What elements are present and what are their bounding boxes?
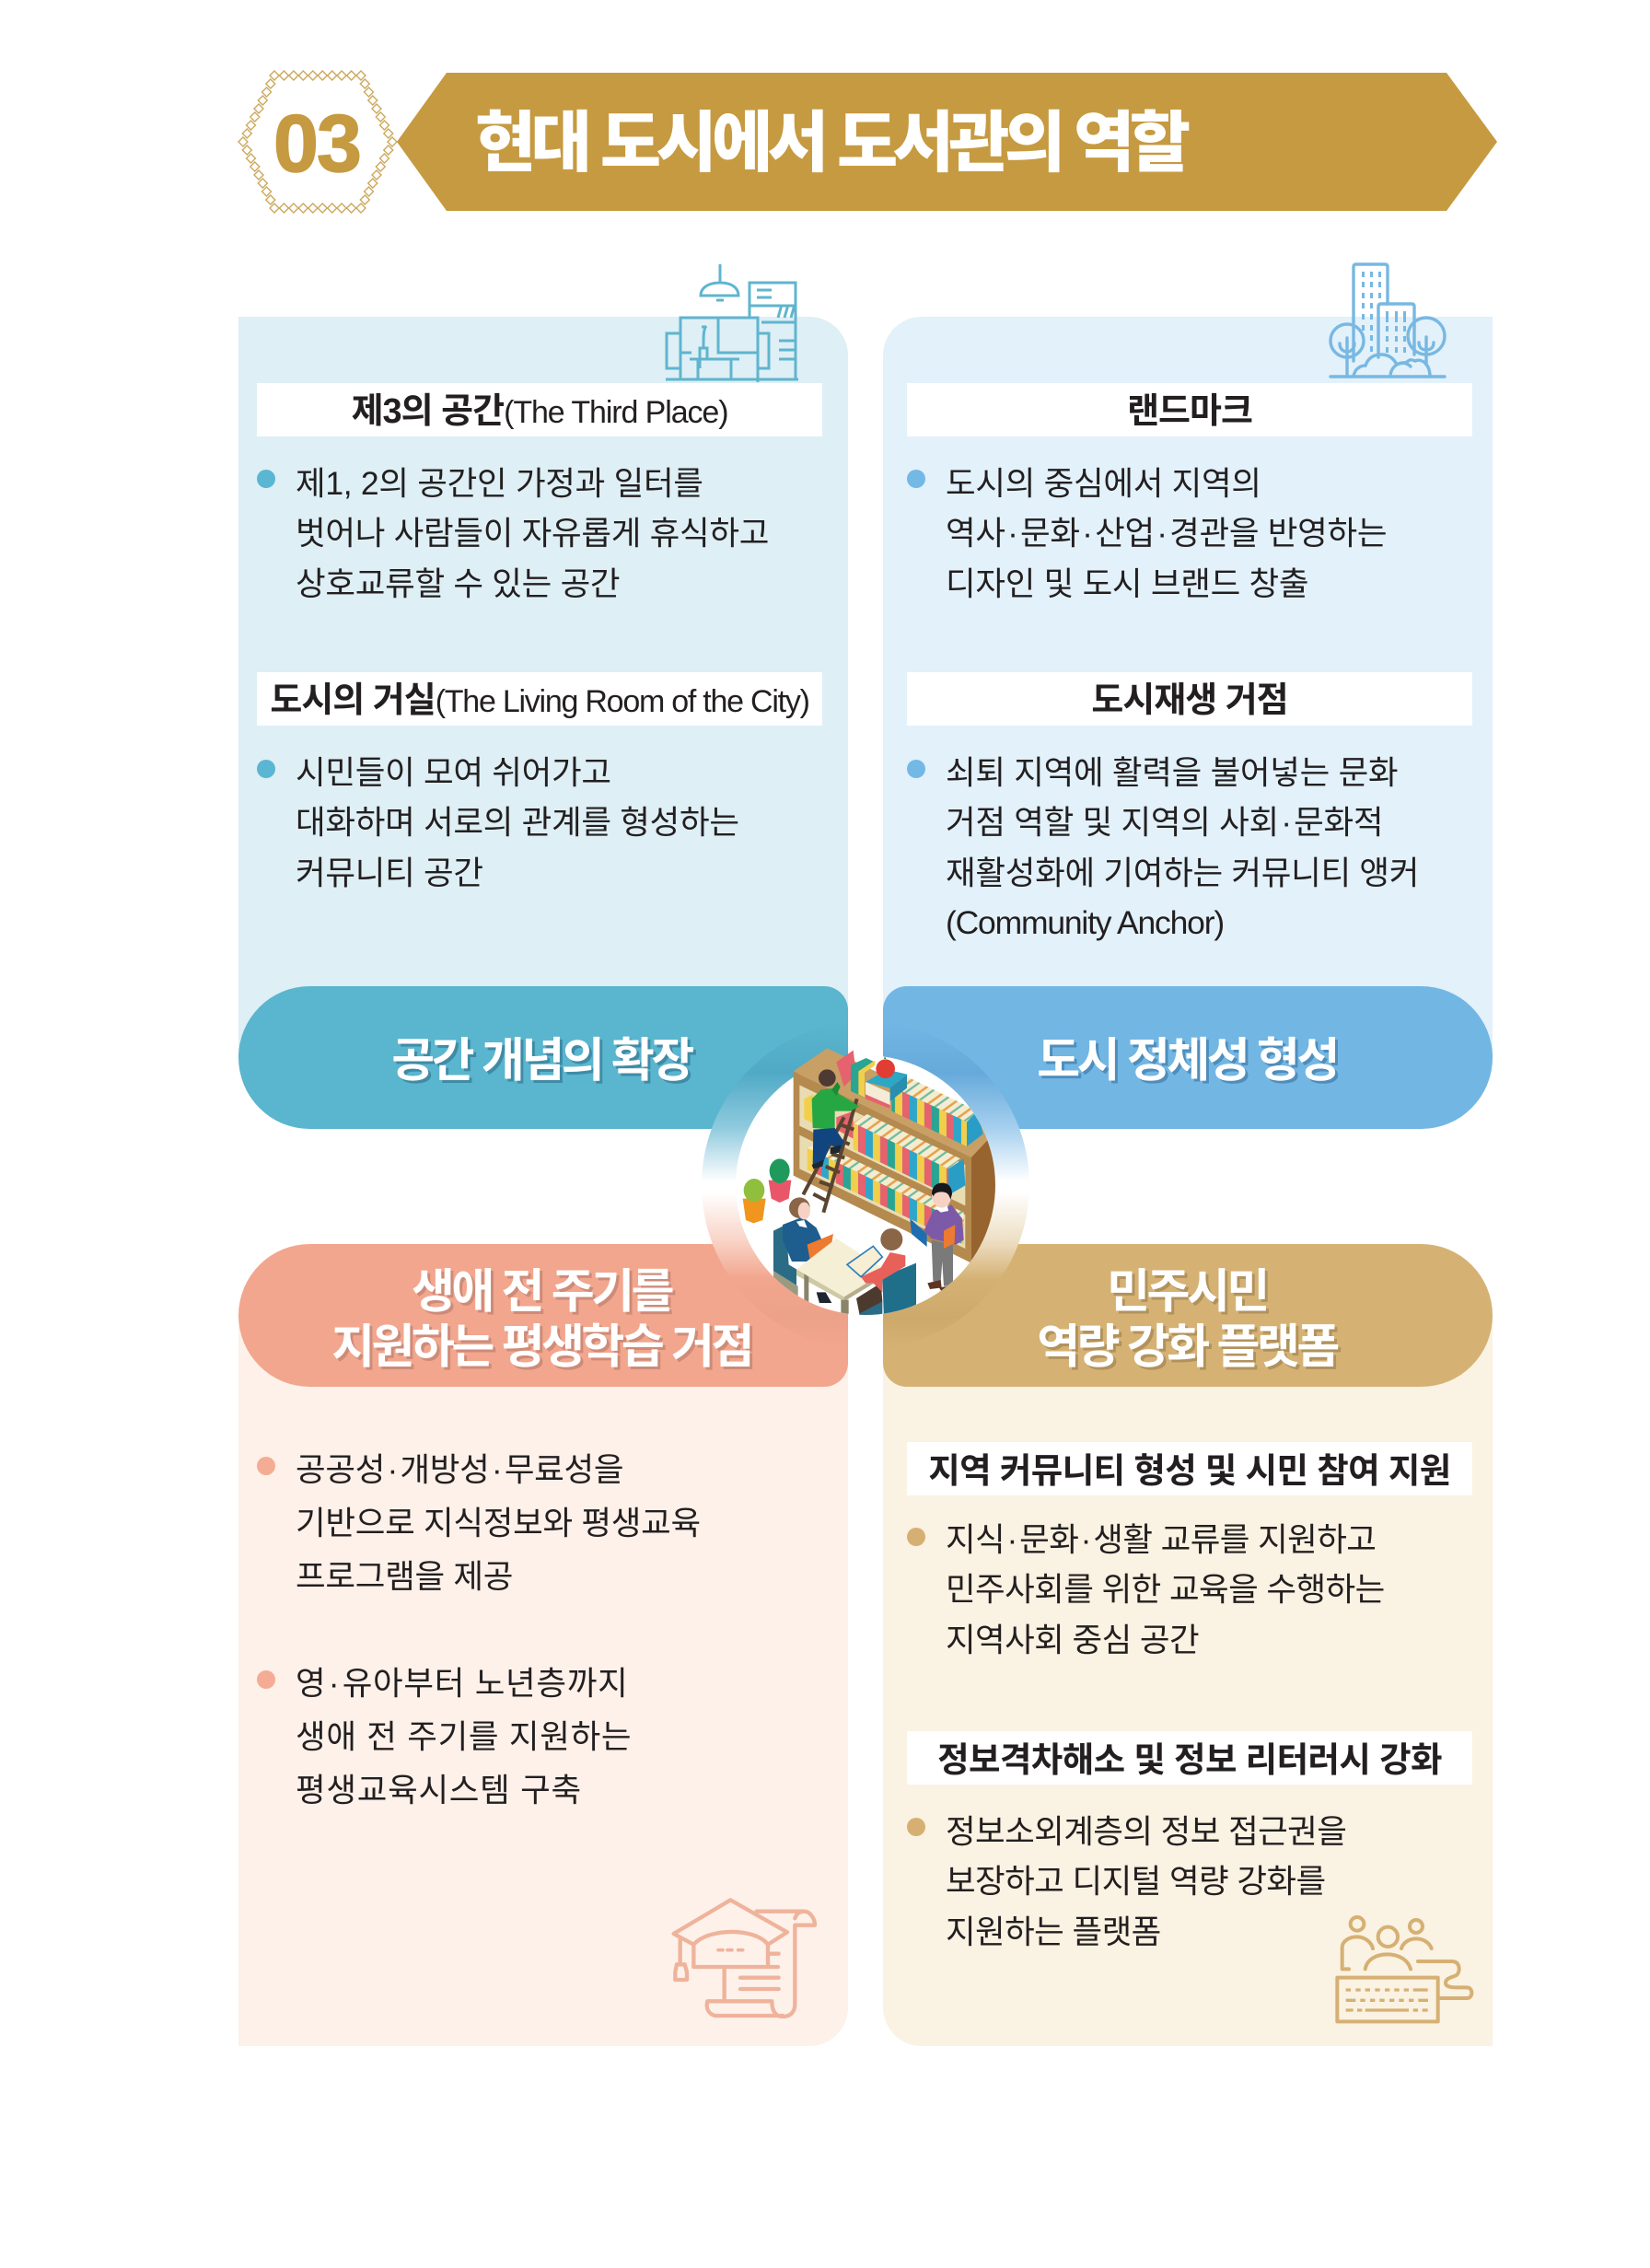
central library illustration (702, 1048, 1029, 1320)
title banner: 현대 도시에서 도서관의 역할 (475, 88, 1190, 185)
hexagon number badge: 03 (273, 98, 360, 189)
heading: 정보격차해소: 정보격차해소 및 정보 리터러시 강화 (937, 1740, 1442, 1779)
table (796, 1239, 887, 1297)
icon: city buildings (1329, 262, 1447, 378)
text block: 평생교육 프로그램 (296, 1451, 701, 1595)
text block: 제3의 공간 설명: 상호교류할 수 있는 공간 (296, 565, 620, 602)
text block: 민주사회 교육: 지식·문화·생활 교류를 지원하고 (946, 1521, 1376, 1558)
shelf (794, 1048, 997, 1157)
pill: 생애 전 주기: 지원하는 평생학습 거점 (331, 1308, 751, 1376)
text block: 도시의 거실 설명: 커뮤니티 공간 (296, 855, 483, 891)
text block: 랜드마크 설명: 디자인 및 도시 브랜드 창출 (946, 565, 1308, 602)
panel: 민주시민 역량 강화 (883, 1315, 1493, 2046)
text block: 디지털 역량: 보장하고 디지털 역량 강화를 (946, 1863, 1326, 1900)
text block: 평생교육시스템: 영·유아부터 노년층까지 (296, 1665, 628, 1702)
bullet (907, 470, 925, 488)
text block: 민주사회 교육 (946, 1521, 1385, 1658)
text block: 디지털 역량: 정보소외계층의 정보 접근권을 (946, 1813, 1346, 1850)
text block: 랜드마크 설명: 도시의 중심에서 지역의 (946, 465, 1261, 502)
books on top (836, 1051, 856, 1087)
pill: 생애 전 주기 (238, 1244, 848, 1387)
ladder (803, 1099, 857, 1213)
pill: 민주시민 역량: 역량 강화 플랫폼 (1037, 1308, 1337, 1376)
text block: 평생교육 프로그램: 기반으로 지식정보와 평생교육 (296, 1505, 701, 1541)
text block: 도시재생 거점 설명: 재활성화에 기여하는 커뮤니티 앵커 (946, 855, 1419, 891)
text block: 도시의 거실 설명: 시민들이 모여 쉬어가고 (296, 754, 611, 791)
standing person (932, 1240, 953, 1286)
panel: 도시 정체성 형성 (883, 317, 1493, 1058)
text block: 도시의 거실 설명 (296, 754, 739, 891)
icon: living room (665, 264, 798, 382)
text block: 민주사회 교육: 민주사회를 위한 교육을 수행하는 (946, 1571, 1385, 1608)
books (891, 1077, 978, 1122)
heading: 도시재생 거점 (907, 672, 1472, 726)
text block: 도시의 거실 설명: 대화하며 서로의 관계를 형성하는 (296, 804, 739, 841)
text block: 평생교육 프로그램: 프로그램을 제공 (296, 1558, 513, 1595)
heading: 정보격차해소 (907, 1731, 1472, 1785)
bullet (257, 1670, 275, 1689)
text block: 디지털 역량 (946, 1813, 1346, 1950)
text block: 제3의 공간 설명: 제1, 2의 공간인 가정과 일터를 (296, 465, 703, 502)
text block: 평생교육시스템: 생애 전 주기를 지원하는 (296, 1718, 632, 1755)
text block: 제3의 공간 설명: 벗어나 사람들이 자유롭게 휴식하고 (296, 515, 769, 552)
bullet (257, 470, 275, 488)
pill: 민주시민 역량: 민주시민 (1107, 1252, 1267, 1320)
text block: 도시재생 거점 설명: 쇠퇴 지역에 활력을 불어넣는 문화 (946, 754, 1398, 791)
bullet (907, 1818, 925, 1836)
seated person right and chair (882, 1263, 916, 1314)
bullet (907, 760, 925, 778)
bullet (257, 760, 275, 778)
panel: 평생학습 거점 (238, 1315, 848, 2046)
hexagon number badge (238, 70, 398, 214)
heading: 지역 커뮤니티 형성 (907, 1442, 1472, 1495)
pill: 공간 개념의 확장 (238, 986, 848, 1129)
heading: 랜드마크 (907, 383, 1472, 436)
text block: 랜드마크 설명: 역사·문화·산업·경관을 반영하는 (946, 515, 1387, 552)
pill: 생애 전 주기: 생애 전 주기를 (412, 1252, 671, 1320)
heading: 제3의 공간 (257, 383, 822, 436)
bullet (907, 1528, 925, 1546)
panel: 공간 개념의 확장 (238, 317, 848, 1058)
text block: 제3의 공간 설명 (296, 465, 769, 602)
icon: people and keyboard (1335, 1915, 1473, 2024)
heading: 도시재생 거점: 도시재생 거점 (1091, 681, 1288, 720)
heading: 도시의 거실 (257, 672, 822, 726)
text block: 도시재생 거점 설명 (946, 754, 1419, 941)
heading: 도시의 거실: 도시의 거실(The Living Room of the City) (270, 681, 809, 720)
ring (719, 1039, 1012, 1332)
person climbing (812, 1088, 859, 1130)
pill: 도시 정체성 형성: 도시 정체성 형성 (1037, 1022, 1337, 1090)
pill: 공간 개념의 확장: 공간 개념의 확장 (391, 1022, 691, 1090)
text block: 디지털 역량: 지원하는 플랫폼 (946, 1913, 1161, 1950)
text block: 민주사회 교육: 지역사회 중심 공간 (946, 1622, 1199, 1658)
title banner (397, 73, 1497, 211)
icon: graduation cap and scroll (672, 1898, 818, 2018)
pill: 도시 정체성 형성 (883, 986, 1493, 1129)
seated person left and chair (773, 1225, 796, 1286)
text block: 평생교육시스템: 평생교육시스템 구축 (296, 1772, 582, 1809)
text block: 랜드마크 설명 (946, 465, 1387, 602)
text block: 평생교육 프로그램: 공공성·개방성·무료성을 (296, 1451, 623, 1488)
plants (743, 1199, 766, 1223)
text block: 도시재생 거점 설명: 거점 역할 및 지역의 사회·문화적 (946, 804, 1383, 841)
heading: 랜드마크: 랜드마크 (1127, 392, 1252, 431)
text block: 도시재생 거점 설명: (Community Anchor) (946, 904, 1224, 941)
text block: 평생교육시스템 (296, 1665, 632, 1809)
pill: 민주시민 역량 (883, 1244, 1493, 1387)
heading: 제3의 공간: 제3의 공간(The Third Place) (352, 392, 727, 431)
bullet (257, 1457, 275, 1475)
heading: 지역 커뮤니티 형성: 지역 커뮤니티 형성 및 시민 참여 지원 (928, 1451, 1451, 1490)
